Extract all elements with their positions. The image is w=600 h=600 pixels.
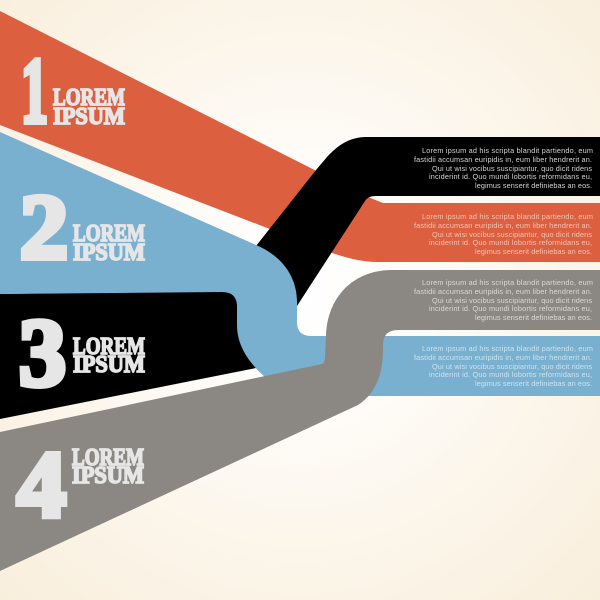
text block: black panel: legimus senserit definiebas an eos. bbox=[475, 181, 592, 190]
text block: gray panel: Lorem ipsum ad his scripta blandit partiendo, eum bbox=[422, 278, 593, 287]
label: lorem ipsum 3: LOREM bbox=[73, 334, 145, 360]
label: number 3: 3 bbox=[19, 299, 66, 406]
text block: black panel: Qui ut wisi vocibus suscipiantur, quo dicit ridens bbox=[432, 164, 592, 173]
label: lorem ipsum 2: IPSUM bbox=[73, 240, 145, 266]
label: number 4: 4 bbox=[17, 433, 66, 537]
text block: blue panel: legimus senserit definiebas an eos. bbox=[475, 379, 592, 388]
label: number 1: 1 bbox=[21, 40, 48, 143]
panel: red band 1 bbox=[0, 11, 600, 262]
text block: blue panel: fastidii accumsan euripidis in, eum liber hendrerit an. bbox=[414, 353, 592, 362]
text block: red panel: legimus senserit definiebas an eos. bbox=[475, 247, 592, 256]
text block: black panel bbox=[414, 146, 593, 190]
label: lorem ipsum 1: IPSUM bbox=[53, 104, 125, 130]
text block: red panel: fastidii accumsan euripidis in, eum liber hendrerit an. bbox=[414, 221, 592, 230]
text block: gray panel: fastidii accumsan euripidis in, eum liber hendrerit an. bbox=[414, 287, 592, 296]
text block: gray panel: legimus senserit definiebas an eos. bbox=[475, 313, 592, 322]
label: lorem ipsum 4 bbox=[72, 445, 144, 489]
text block: blue panel: Lorem ipsum ad his scripta blandit partiendo, eum bbox=[422, 344, 593, 353]
label: lorem ipsum 3: IPSUM bbox=[73, 352, 145, 378]
label: lorem ipsum 4: LOREM bbox=[72, 445, 144, 471]
text block: red panel: inciderint id. Quo mundi lobortis reformidans eu, bbox=[429, 238, 592, 247]
label: lorem ipsum 2: LOREM bbox=[73, 221, 145, 247]
text block: red panel: Lorem ipsum ad his scripta blandit partiendo, eum bbox=[422, 212, 593, 221]
text block: gray panel bbox=[414, 278, 593, 322]
label: lorem ipsum 4: IPSUM bbox=[72, 463, 144, 489]
label: lorem ipsum 1 bbox=[53, 85, 125, 130]
panel: blue band bbox=[0, 132, 600, 396]
panel: black band 3 left bbox=[0, 290, 275, 419]
text block: blue panel: Qui ut wisi vocibus suscipiantur, quo dicit ridens bbox=[432, 362, 592, 371]
panel: gray band bbox=[0, 270, 600, 571]
text block: black panel: inciderint id. Quo mundi lobortis reformidans eu, bbox=[429, 172, 592, 181]
text block: red panel bbox=[414, 212, 593, 256]
text block: black panel: fastidii accumsan euripidis in, eum liber hendrerit an. bbox=[414, 155, 592, 164]
text block: gray panel: inciderint id. Quo mundi lobortis reformidans eu, bbox=[429, 304, 592, 313]
label: lorem ipsum 3 bbox=[73, 334, 145, 378]
text block: red panel: Qui ut wisi vocibus suscipiantur, quo dicit ridens bbox=[432, 230, 592, 239]
panel: black band 1 bbox=[256, 137, 600, 306]
text block: black panel: Lorem ipsum ad his scripta blandit partiendo, eum bbox=[422, 146, 593, 155]
label: lorem ipsum 2 bbox=[73, 221, 145, 266]
text block: gray panel: Qui ut wisi vocibus suscipiantur, quo dicit ridens bbox=[432, 296, 592, 305]
label: lorem ipsum 1: LOREM bbox=[53, 85, 125, 111]
text block: blue panel: inciderint id. Quo mundi lobortis reformidans eu, bbox=[429, 370, 592, 379]
text block: blue panel bbox=[414, 344, 593, 388]
label: number 2: 2 bbox=[20, 176, 68, 278]
